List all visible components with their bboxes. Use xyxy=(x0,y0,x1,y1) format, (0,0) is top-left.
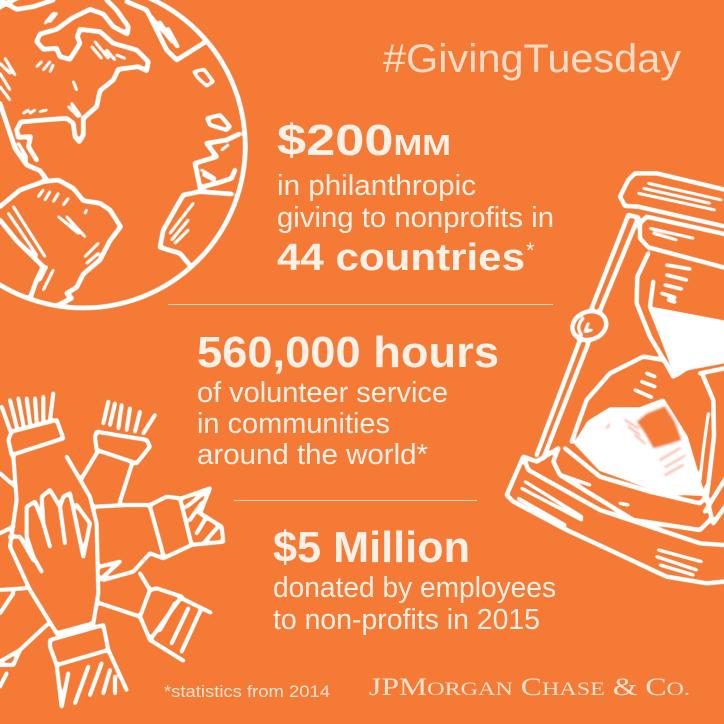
stat block: 200MM xyxy=(277,116,554,279)
hourglass: sand mound xyxy=(637,406,682,448)
stat description line 2: giving to nonprofits in xyxy=(277,202,554,234)
stat description line 2: in communities xyxy=(197,408,390,440)
globe: africa coast xyxy=(160,192,232,263)
stat description: in philanthropic xyxy=(277,170,476,202)
hands: lower-right arm xyxy=(100,573,182,640)
stat description: donated by employees xyxy=(273,572,556,604)
hands: main arm xyxy=(10,457,98,633)
stat highlight: 44 countries xyxy=(277,237,525,279)
hands: lower-right fringe xyxy=(150,598,211,661)
hands: thumb xyxy=(10,537,33,560)
globe: arctic coast xyxy=(0,0,53,9)
asterisk: * xyxy=(526,238,535,263)
stat headline: $5 Million xyxy=(273,523,470,572)
stat description: of volunteer service xyxy=(197,377,448,409)
icon: joined hands xyxy=(0,393,223,707)
hourglass: upper sand xyxy=(654,308,724,373)
footnote: *statistics from 2014 xyxy=(164,682,330,701)
stat block: volunteer hours xyxy=(197,328,499,471)
divider 2 xyxy=(234,500,477,501)
stat headline: $200 MM xyxy=(277,116,451,165)
hourglass: cap engraving xyxy=(638,183,722,240)
hourglass: right rod xyxy=(705,477,724,523)
hands: top-left sleeve xyxy=(2,393,63,455)
hourglass: base engraving xyxy=(518,475,702,575)
globe: hatching xyxy=(0,13,228,290)
stat block: donations xyxy=(273,523,556,636)
hourglass: knob xyxy=(568,307,610,345)
hands: small thumb xyxy=(100,562,120,578)
globe: greenland xyxy=(127,2,203,60)
hourglass: top cap xyxy=(620,173,724,270)
hourglass: lower sand xyxy=(575,399,704,495)
hands: right sleeve line xyxy=(150,507,163,555)
title: GivingTuesday: #GivingTuesday xyxy=(383,37,681,81)
hands: right arm xyxy=(95,497,192,580)
hourglass: sand texture xyxy=(607,420,685,475)
hourglass: base lower disc xyxy=(507,448,724,583)
globe: iceland xyxy=(194,69,213,86)
icon: hourglass xyxy=(507,173,724,583)
hourglass: upper glass xyxy=(572,253,724,493)
hourglass: base upper disc xyxy=(553,448,712,530)
hourglass: knob swirl xyxy=(579,318,592,335)
hourglass: upper highlights xyxy=(635,265,690,397)
hourglass: left rod xyxy=(537,215,638,458)
hands: fingers xyxy=(27,490,90,572)
hourglass: right inner line xyxy=(700,413,708,480)
globe: north america outline xyxy=(0,0,148,182)
stat headline: 560,000 hours xyxy=(197,328,499,377)
globe: british isles xyxy=(207,115,230,130)
hands: left partial arms xyxy=(0,473,47,687)
icon: globe xyxy=(0,0,245,308)
divider 1 xyxy=(168,304,553,305)
logo: JPMorgan Chase: JPM ORGAN C HASE & C O. xyxy=(369,674,690,701)
hands: bottom fringe xyxy=(57,650,127,707)
stat description line 2: to non-profits in 2015 xyxy=(273,604,540,636)
hands: bottom sleeve xyxy=(50,625,108,665)
globe: europe coast xyxy=(195,134,239,187)
hands: right fringe xyxy=(182,488,223,545)
stat description line 3: around the world* xyxy=(197,439,428,471)
globe: south america outline xyxy=(0,180,121,305)
hands: top sleeve xyxy=(95,402,155,463)
hands: top arm xyxy=(82,453,132,502)
